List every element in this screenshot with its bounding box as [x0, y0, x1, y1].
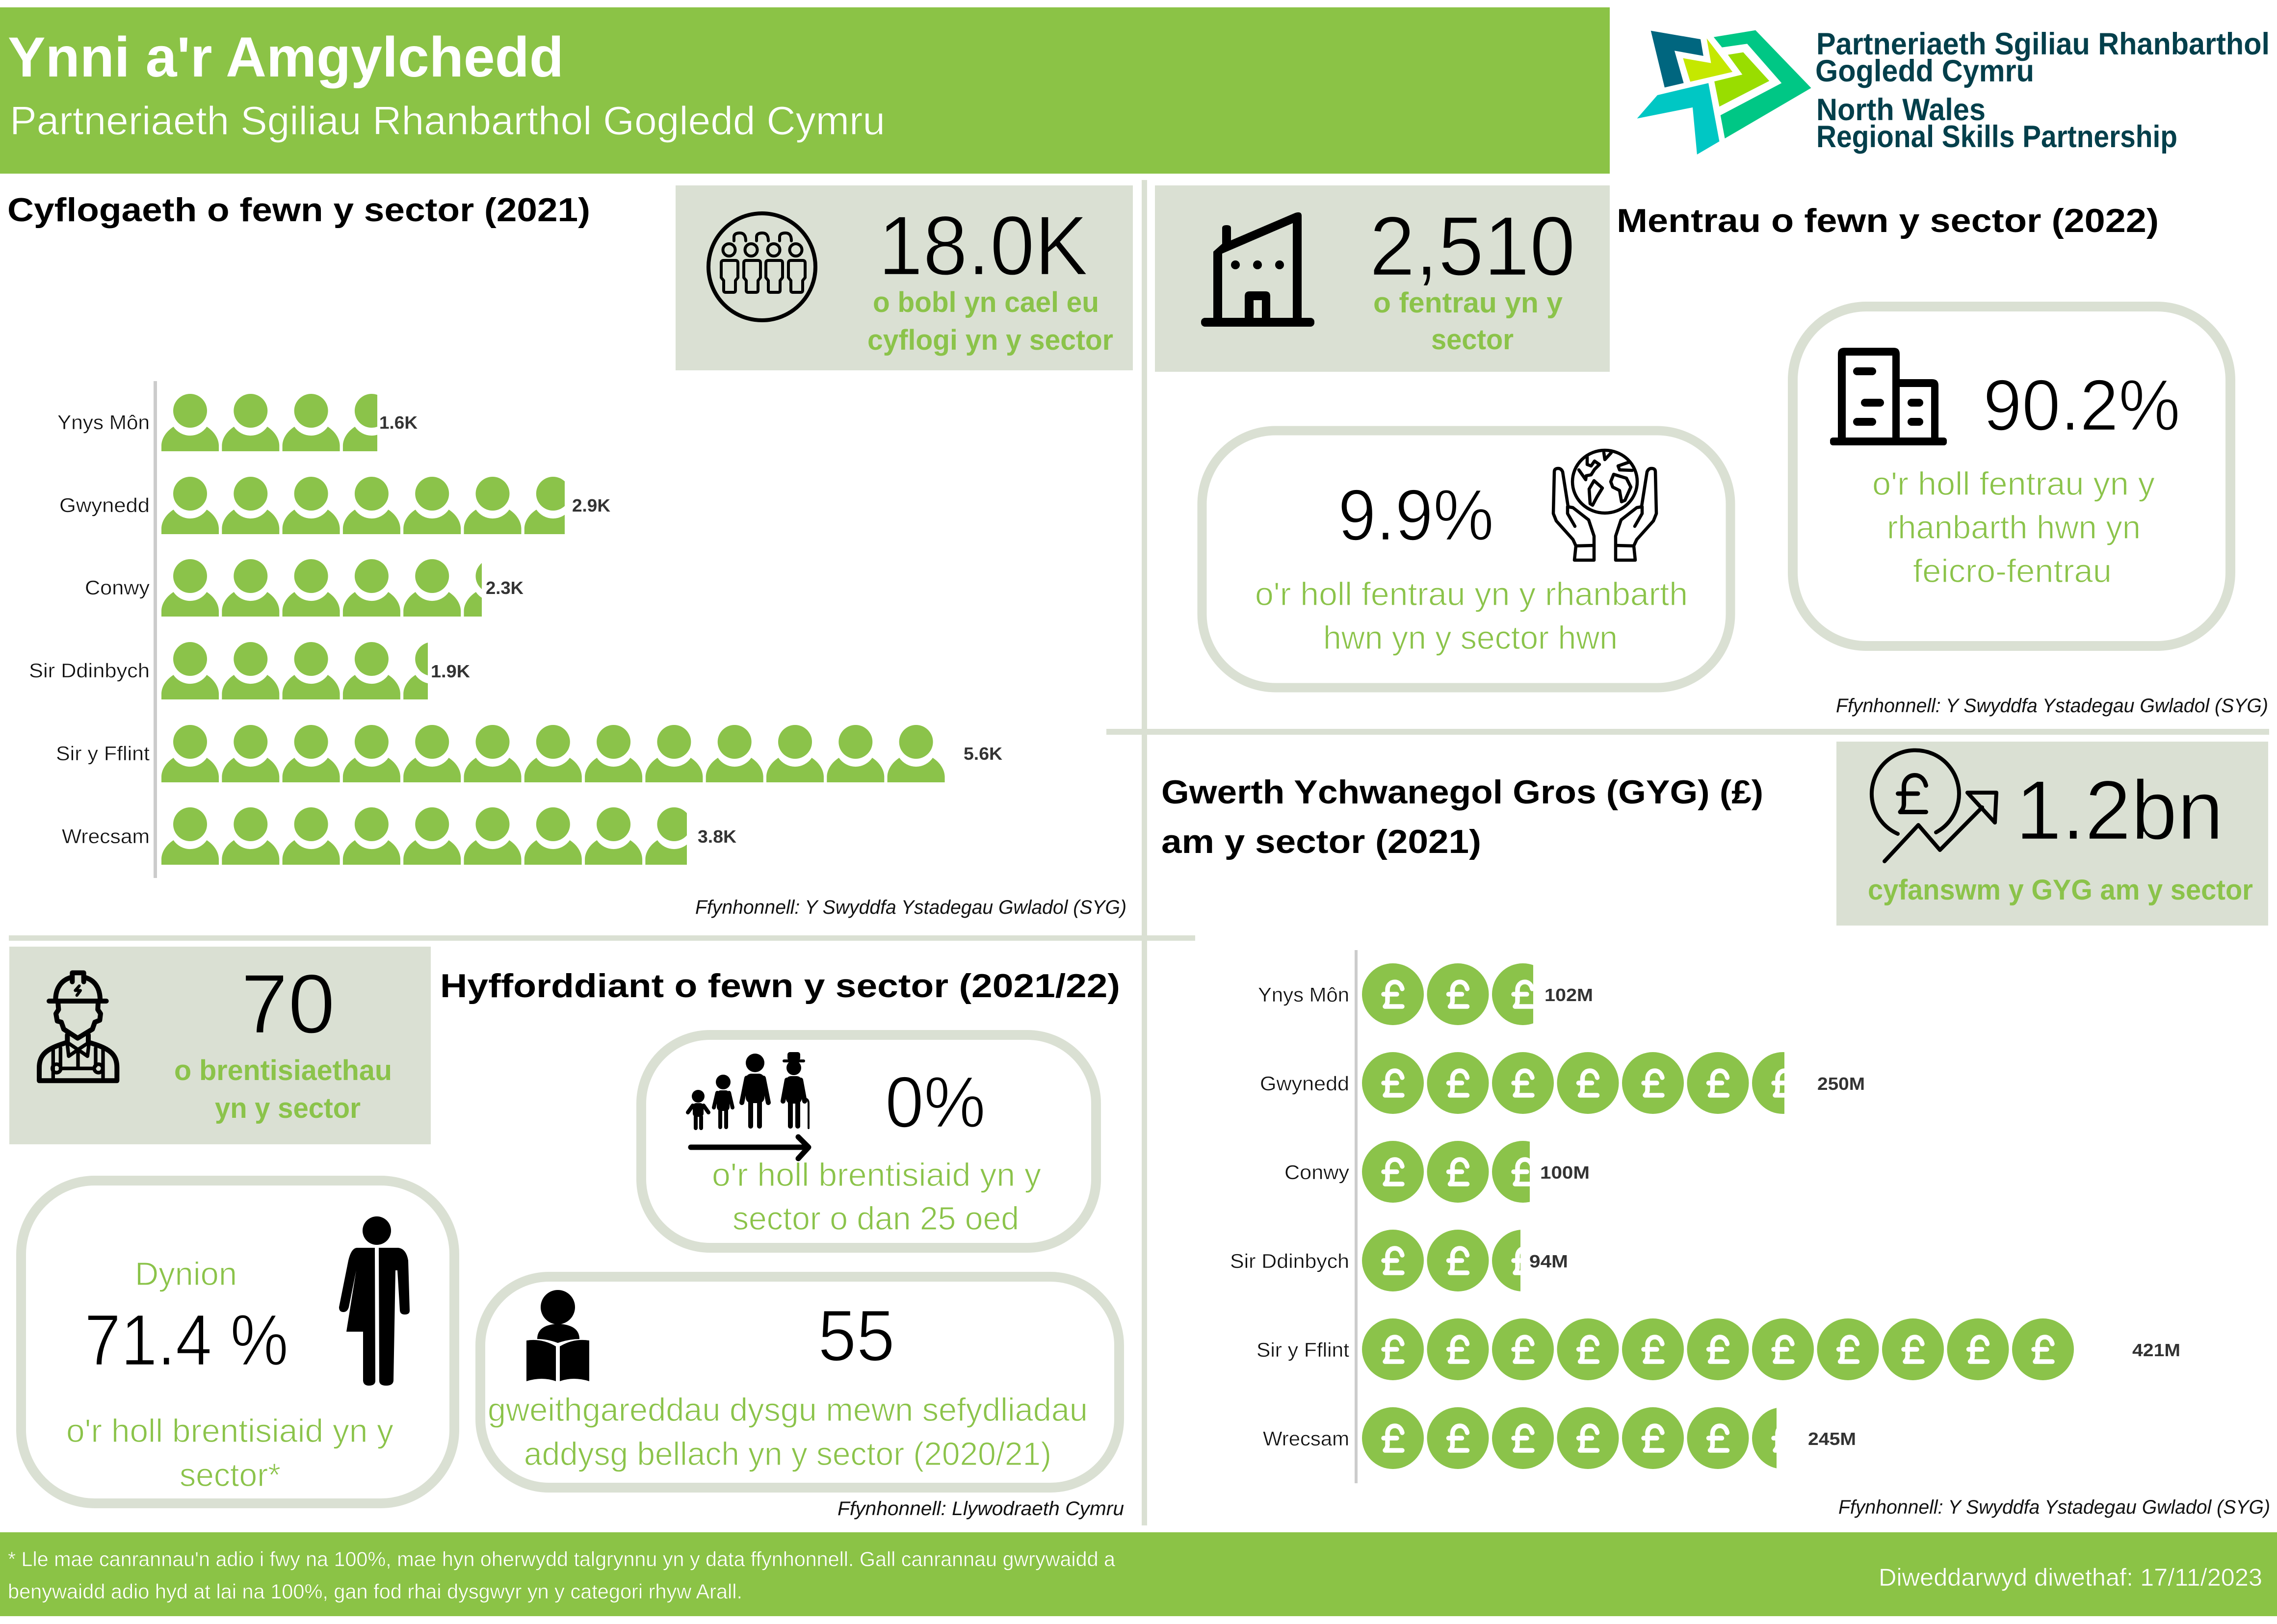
icon: person reading [526, 1290, 589, 1381]
caption: yn y sector [215, 1092, 361, 1124]
row: Sir y Fflint [56, 725, 1002, 782]
row: Ynys Môn [1258, 963, 1593, 1025]
label: Dynion [135, 1256, 237, 1292]
icon: crowd in circle [708, 213, 815, 320]
panel: enterprises total [1155, 185, 1610, 372]
source: GVA: Ffynhonnell: Y Swyddfa Ystadegau Gwladol (SYG) [1838, 1496, 2270, 1518]
row: Wrecsam: 245M [1808, 1429, 1856, 1449]
heading: GVA: Gwerth Ychwanegol Gros (GYG) (£) [1161, 773, 1763, 811]
panel: male apprentices [21, 1181, 454, 1503]
logo text: North Wales [1816, 93, 1986, 127]
row: Ynys Môn: Ynys Môn [57, 411, 150, 434]
panel: employment total [676, 185, 1133, 370]
row: Wrecsam [62, 807, 736, 865]
logo text: Gogledd Cymru [1815, 54, 2034, 88]
row: Sir y Fflint: Sir y Fflint [1256, 1339, 1350, 1361]
caption: o'r holl brentisiaid yn y [66, 1413, 393, 1449]
panel: apprentices under 25 [641, 1035, 1096, 1248]
row: Wrecsam: Wrecsam [62, 825, 150, 848]
number: 2,510 [1369, 199, 1575, 293]
icon: pound coin with rising arrow [1872, 750, 1996, 861]
source: employment: Ffynhonnell: Y Swyddfa Ystadegau Gwladol (SYG) [695, 897, 1126, 918]
panel: GVA total [1836, 742, 2268, 926]
heading: GVA: am y sector (2021) [1161, 823, 1481, 860]
row: Ynys Môn: 102M [1544, 985, 1593, 1005]
caption [712, 1157, 1042, 1237]
caption: o'r holl fentrau yn y rhanbarth [1255, 576, 1688, 613]
caption: o'r holl brentisiaid yn y [712, 1157, 1042, 1193]
row: Conwy [1284, 1141, 1590, 1203]
row: Sir y Fflint: Sir y Fflint [56, 742, 150, 765]
caption: o'r holl fentrau yn y [1872, 465, 2155, 502]
logo text [1815, 27, 2270, 154]
title: Ynni a'r Amgylchedd [8, 26, 564, 89]
logo mark [1637, 30, 1811, 155]
row: Sir Ddinbych: 1.9K [431, 661, 470, 681]
caption [1255, 576, 1688, 656]
row: Sir Ddinbych: Sir Ddinbych [1230, 1250, 1349, 1272]
row: Sir y Fflint: 5.6K [964, 744, 1002, 764]
source: enterprises: Ffynhonnell: Y Swyddfa Ystadegau Gwladol (SYG) [1836, 695, 2268, 717]
heading: GVA [1161, 773, 1763, 860]
footnote: benywaidd adio hyd at lai na 100%, gan fod rhai dysgwyr yn y categori rhyw Arall. [8, 1580, 742, 1603]
number: 0% [885, 1062, 986, 1143]
row: Sir Ddinbych [1230, 1230, 1568, 1291]
row: Ynys Môn: 1.6K [379, 412, 418, 433]
caption [66, 1413, 393, 1494]
row: Sir y Fflint [1256, 1318, 2180, 1380]
caption [174, 1055, 392, 1124]
number: 1.2bn [2015, 763, 2224, 857]
caption [488, 1392, 1088, 1472]
panel: micro-enterprises [1793, 307, 2230, 646]
number: 18.0K [878, 199, 1088, 293]
icon: male and female figure [339, 1216, 410, 1386]
row: Conwy: Conwy [1284, 1161, 1350, 1184]
row: Ynys Môn: Ynys Môn [1258, 983, 1349, 1006]
number: 70 [241, 957, 335, 1051]
caption: rhanbarth hwn yn [1887, 509, 2141, 546]
row: Sir y Fflint: 421M [2132, 1340, 2180, 1360]
number: 71.4 % [84, 1300, 288, 1381]
row: Gwynedd [59, 477, 610, 534]
panel: apprenticeships total [9, 947, 431, 1144]
row: Conwy: 2.3K [486, 578, 523, 598]
row: Wrecsam: Wrecsam [1263, 1427, 1349, 1450]
caption: sector o dan 25 oed [733, 1200, 1019, 1237]
row: Conwy [85, 559, 523, 617]
row: Sir Ddinbych: Sir Ddinbych [29, 659, 150, 682]
panel: learning activities [480, 1277, 1119, 1488]
caption: sector [1431, 324, 1514, 356]
row: Gwynedd: Gwynedd [1260, 1072, 1349, 1095]
caption [867, 286, 1113, 356]
footer [0, 1532, 2277, 1616]
heading: enterprises: Mentrau o fewn y sector (2022) [1617, 202, 2159, 239]
row: Gwynedd: 250M [1817, 1074, 1865, 1094]
caption: o bobl yn cael eu [873, 286, 1099, 318]
caption [1872, 465, 2155, 590]
panel: share of enterprises [1202, 431, 1730, 688]
row: Sir Ddinbych: 94M [1529, 1251, 1568, 1271]
number: 9.9% [1338, 475, 1494, 556]
row: Wrecsam: 3.8K [698, 826, 736, 847]
heading: training: Hyfforddiant o fewn y sector (2021/22) [440, 967, 1120, 1005]
row: Wrecsam [1263, 1407, 1856, 1469]
caption [1373, 287, 1563, 356]
row: Conwy: 100M [1540, 1162, 1590, 1183]
chart: employment by area [29, 381, 1002, 878]
icon: worker with hard hat [39, 973, 117, 1081]
caption: sector* [180, 1457, 281, 1494]
row: Gwynedd: Gwynedd [59, 494, 150, 516]
logo [1637, 27, 2270, 155]
caption: cyflogi yn y sector [867, 324, 1113, 356]
row: Sir Ddinbych [29, 642, 470, 699]
icon: factory [1201, 212, 1314, 327]
row: Ynys Môn [57, 394, 418, 451]
caption: cyfanswm y GYG am y sector [1868, 874, 2253, 906]
source: training: Ffynhonnell: Llywodraeth Cymru [838, 1498, 1124, 1520]
caption: hwn yn y sector hwn [1323, 619, 1618, 656]
last updated: Diweddarwyd diwethaf: 17/11/2023 [1879, 1564, 2262, 1591]
icon: office buildings [1830, 348, 1947, 445]
heading: employment: Cyflogaeth o fewn y sector (2021) [7, 191, 590, 229]
logo text: Regional Skills Partnership [1816, 120, 2177, 154]
caption: addysg bellach yn y sector (2020/21) [524, 1436, 1051, 1472]
header banner [0, 7, 1610, 174]
row: Conwy: Conwy [85, 576, 150, 599]
row: Gwynedd [1260, 1052, 1865, 1114]
caption: gweithgareddau dysgu mewn sefydliadau [488, 1392, 1088, 1428]
icon: age groups with arrow [688, 1052, 809, 1159]
number: 90.2% [1983, 365, 2180, 446]
number: 55 [818, 1295, 895, 1376]
caption: feicro-fentrau [1913, 553, 2112, 590]
footnote [8, 1547, 1116, 1603]
row: Gwynedd: 2.9K [572, 495, 610, 516]
subtitle: Partneriaeth Sgiliau Rhanbarthol Gogledd Cymru [10, 99, 885, 143]
footnote: * Lle mae canrannau'n adio i fwy na 100%, mae hyn oherwydd talgrynnu yn y data ffynhonnell. Gall canrannau gwrywaidd a [8, 1547, 1116, 1571]
caption: o fentrau yn y [1373, 287, 1563, 319]
caption: o brentisiaethau [174, 1055, 392, 1086]
chart: GVA by area [1230, 950, 2180, 1483]
icon: hands holding globe [1553, 450, 1656, 560]
